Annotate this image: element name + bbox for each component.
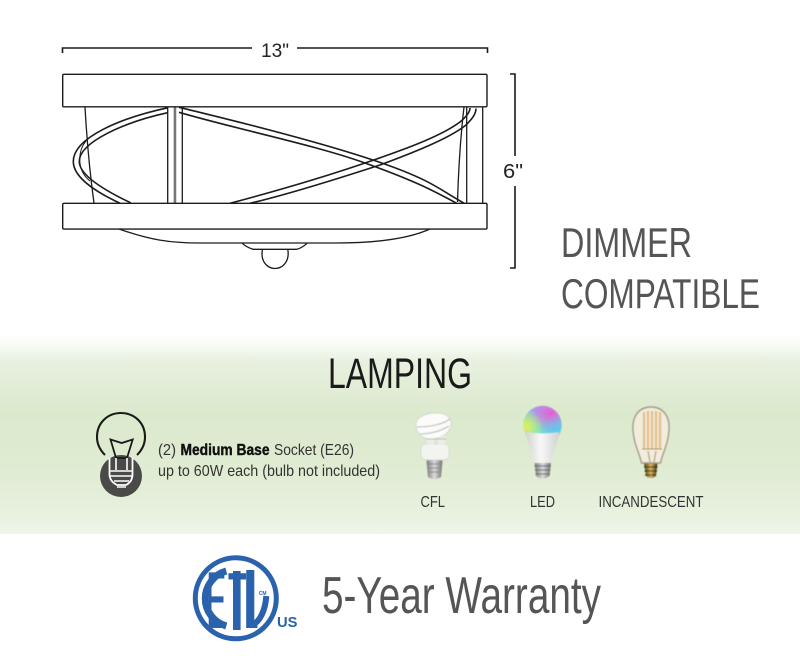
socket description text: up to 60W each (bulb not included) (158, 463, 380, 480)
logo: ETL US certification: T (228, 555, 247, 648)
icon: medium base bulb (97, 413, 145, 497)
left looping strap (73, 108, 168, 203)
socket description text: Socket (E26) (274, 442, 354, 459)
line drawing: ceiling light fixture (63, 74, 487, 268)
socket description text: (2) (158, 442, 176, 459)
logo: ETL US certification: L (244, 556, 258, 646)
logo: ETL US certification: CM (259, 591, 267, 597)
icon: vintage incandescent bulb (633, 407, 669, 478)
heading: dimmer compatible: DIMMER (561, 219, 692, 266)
bulb type labels: INCANDESCENT (598, 494, 704, 511)
icon: CFL bulb (416, 413, 451, 479)
heading: dimmer compatible (561, 219, 760, 317)
socket description text (158, 442, 380, 480)
green lamping background band (0, 333, 800, 534)
dimension: width 13 inches: 13" (261, 41, 289, 62)
descending strap (179, 107, 464, 203)
logo: ETL US certification: US (277, 615, 298, 631)
warranty text: 5-Year Warranty (322, 567, 601, 625)
heading: lamping: LAMPING (328, 350, 472, 398)
bulb type labels: LED (530, 494, 555, 511)
logo: ETL US certification: E (206, 556, 226, 646)
glass shade edges (85, 107, 464, 203)
dimension: height 6 inches (503, 74, 523, 268)
finial ball and collar (242, 243, 307, 268)
bulb type labels (420, 494, 704, 511)
bulb type labels: CFL (420, 494, 445, 511)
cage vertical bars (168, 107, 483, 203)
dimension: width 13 inches (62, 41, 488, 62)
logo: ETL US certification (195, 555, 298, 648)
socket description text: Medium Base (180, 442, 270, 459)
ceiling canopy band (63, 74, 487, 107)
dimension: height 6 inches: 6" (503, 161, 523, 183)
glass bowl bottom (119, 229, 430, 243)
icon: color LED bulb (523, 406, 562, 478)
lower trim band (63, 203, 487, 229)
ascending strap (230, 108, 470, 203)
